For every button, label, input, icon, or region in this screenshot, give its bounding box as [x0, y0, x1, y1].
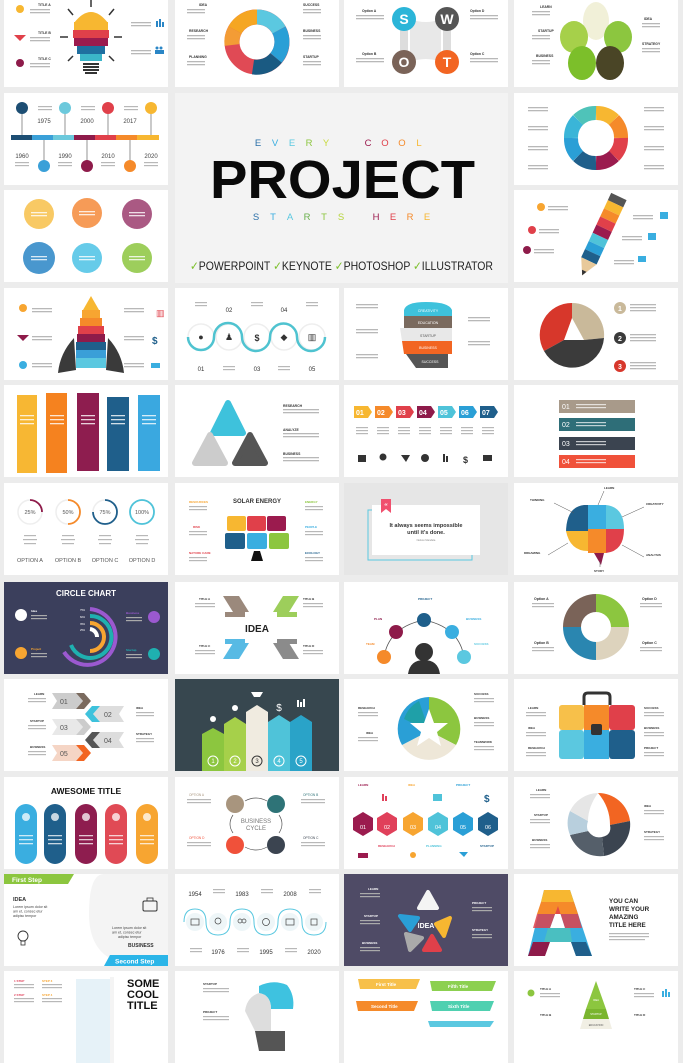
tagline: every cool [255, 138, 422, 149]
tile: quote card: It always seems impossible [389, 523, 463, 529]
tile: person network: PROJECT [418, 597, 432, 601]
tile: percentage rings: 100% [135, 510, 149, 516]
tile: person network [344, 582, 508, 674]
tile: head layers: SUCCESS [422, 360, 439, 364]
tile: percentage rings [4, 483, 168, 575]
tagline: starts here: T [321, 212, 327, 223]
tile: idea star dark: LEARN [368, 887, 378, 891]
tagline: every cool: Y [323, 138, 330, 149]
tile: idea star dark: PROJECT [472, 901, 486, 905]
tile: circles timeline: 1983 [235, 892, 249, 898]
tagline: starts here: R [304, 212, 311, 223]
tile: head layers: CREATIVITY [418, 309, 439, 313]
tile: person network: PLAN [374, 617, 382, 621]
tile: star ring: TEAMWORK [474, 740, 493, 744]
tile: first step / second step: IDEA [13, 897, 26, 903]
tile: numbered tabs: 03 [398, 410, 406, 417]
tile: SWOT: Option B [362, 52, 377, 56]
tile: solar energy: NATURE CARE [189, 551, 211, 555]
tile: briefcase: BUSINESS [644, 726, 659, 730]
tagline: starts here: E [424, 212, 430, 223]
tile: hexagon steps: 01 [360, 825, 366, 831]
tile: brain puzzle: LEARN [604, 486, 614, 490]
tile: ring cycle: PLANNING [189, 55, 207, 59]
tile: idea star dark: STARTUP [364, 914, 378, 918]
tile: chevron steps: LEARN [34, 692, 44, 696]
tile: letter A: WRITE YOUR [609, 906, 650, 913]
tile: idea star dark: STRATEGY [472, 928, 488, 932]
tile: solar energy: ENERGY [305, 500, 318, 504]
tile: idea arrows: TITLE A [199, 597, 211, 601]
tile: year timeline: 2000 [80, 119, 94, 125]
tile: solar energy: RESOURCES [189, 500, 208, 504]
tile: puzzle ring: Option C [642, 641, 657, 645]
tile: awesome title pills: AWESOME TITLE [51, 786, 122, 796]
tile: hexagon steps: STARTUP [480, 844, 494, 848]
tile: percentage rings: OPTION B [55, 558, 81, 564]
tile: pyramid: TITLE D [634, 1013, 646, 1017]
tile: wave steps: $ [254, 333, 260, 343]
tile: ring cycle: SUCCESS [303, 3, 320, 7]
tile: spiral cycle: LEARN [536, 788, 546, 792]
tile: percentage rings: OPTION D [129, 558, 155, 564]
tile: circles timeline: 2008 [283, 892, 297, 898]
tile: person network: TEAM [366, 642, 375, 646]
tile: briefcase: LEARN [528, 706, 538, 710]
tile: year timeline: 2017 [123, 119, 137, 125]
tile: hexagon steps: 05 [460, 825, 466, 831]
tile: solar energy: ECOLOGY [305, 551, 320, 555]
tile: medical ring [514, 93, 678, 185]
software list: ✓POWERPOINT ✓KEYNOTE ✓PHOTOSHOP ✓ILLUSTRATOR [190, 259, 493, 273]
tile: circle chart dark [4, 582, 168, 674]
tile: business cycle: BUSINESS [241, 819, 271, 825]
tile: letter A [514, 874, 678, 966]
tile: chevron steps: 01 [60, 699, 68, 706]
tile: percentage rings: 25% [24, 510, 36, 516]
tile: circle chart dark: Idea [31, 609, 37, 613]
tile: circles timeline: 1976 [211, 950, 225, 956]
tile: spiral cycle: STRATEGY [644, 830, 660, 834]
tile: chevron steps: STRATEGY [136, 732, 152, 736]
tile: chevron steps: 02 [104, 712, 112, 719]
tile: brush titles: Sixth Title [448, 1004, 470, 1009]
tile: letter A: TITLE HERE [609, 922, 646, 929]
tile: some cool title: COOL [127, 989, 159, 1001]
tile: triangle trio [175, 385, 339, 477]
tile: wave steps [175, 288, 339, 380]
tile: idea star dark [344, 874, 508, 966]
tile: wave steps: ◆ [281, 332, 288, 342]
tile: leaves: STRATEGY [642, 42, 661, 46]
tile: SWOT: T [443, 54, 452, 70]
tile: idea star dark: BUSINESS [362, 941, 377, 945]
tile: leaves: BUSINESS [536, 54, 554, 58]
tile: quote card [344, 483, 508, 575]
tile: year timeline: 2020 [144, 154, 158, 160]
tile: circle chart dark: 25% [80, 629, 86, 632]
tile: star ring: IDEA [366, 731, 374, 735]
tile: business cycle: CYCLE [246, 826, 266, 832]
tile: numbered tabs: 04 [419, 410, 427, 417]
tile: brush titles: First Title [376, 982, 397, 987]
tagline: starts here: E [390, 212, 396, 223]
tagline: starts here: A [287, 212, 294, 223]
tile: numbered tabs: 01 [356, 410, 364, 417]
tile: briefcase: RESEARCH [528, 746, 545, 750]
tile: idea arrows [175, 582, 339, 674]
tile: idea arrows: TITLE D [303, 644, 315, 648]
tile: SWOT: S [399, 11, 409, 27]
tile: triangle trio: RESEARCH [283, 404, 303, 408]
tile: pyramid: STARTUP [590, 1013, 602, 1016]
tile: letter A: YOU CAN [609, 898, 638, 905]
tile: dark arrow columns: 5 [299, 759, 303, 765]
tile: hexagon steps: PROJECT [456, 783, 470, 787]
tile: pencil [514, 190, 678, 282]
tile: business cycle: OPTION A [189, 793, 205, 797]
tile: hexagon steps: 06 [485, 825, 491, 831]
tile: business cycle: OPTION D [189, 836, 205, 840]
tile: SWOT [344, 0, 508, 87]
tile: percentage rings: 75% [99, 510, 111, 516]
tile: percentage rings: 50% [62, 510, 74, 516]
tile: percentage rings: OPTION A [17, 558, 43, 564]
tile: triangle cycle: 2 [618, 336, 622, 343]
tagline: starts here [253, 212, 430, 223]
tile: pyramid: TITLE A [540, 987, 552, 991]
tile: circle chart dark: Business [126, 611, 140, 615]
tile: hexagon steps: 02 [384, 825, 390, 831]
tile: triangle trio: ANALYZE [283, 428, 299, 432]
tagline: every cool: O [381, 138, 389, 149]
tile: person network: BUSINESS [466, 617, 481, 621]
tile: some cool title: 2 STEP [14, 993, 24, 997]
tile: pyramid [514, 971, 678, 1063]
tile: first step / second step: First Step [12, 877, 42, 884]
tile: wave steps: 05 [309, 367, 316, 373]
tile: pyramid: EDUCATION [589, 1024, 603, 1027]
tile: business cycle: OPTION C [303, 836, 319, 840]
tile: chevron steps: 05 [60, 751, 68, 758]
tile: ring cycle: STARTUP [303, 55, 319, 59]
tile: numbered tabs [344, 385, 508, 477]
tile: chevron steps: BUSINESS [30, 745, 45, 749]
tile: brush titles: Second Title [371, 1004, 398, 1009]
tile: chevron steps: 03 [60, 725, 68, 732]
tile: SWOT: Option C [470, 52, 485, 56]
tile: some cool title: STEP 3 [42, 979, 53, 983]
tile: some cool title: TITLE [127, 1000, 158, 1012]
tile: year timeline: 1975 [37, 119, 51, 125]
tile: some cool title [4, 971, 168, 1063]
tile: year timeline: 2010 [101, 154, 115, 160]
tile: brain puzzle: DREAMING [524, 551, 541, 555]
tile: some cool title: STEP 4 [42, 993, 53, 997]
tile: circle chart dark: 60% [80, 616, 86, 619]
tile: business cycle [175, 777, 339, 869]
tile: head puzzle [175, 971, 339, 1063]
tile: spiral cycle: STARTUP [534, 813, 548, 817]
tile: circle chart dark: Startup [126, 648, 137, 652]
tagline: starts here: S [253, 212, 259, 223]
tile: briefcase [514, 679, 678, 771]
tile: dark arrow columns [175, 679, 339, 771]
tile: numbered tabs: 05 [440, 410, 448, 417]
tile: pyramid: TITLE B [540, 1013, 552, 1017]
tile: triangle cycle: 3 [618, 364, 622, 371]
tile: brain puzzle [514, 483, 678, 575]
tile: head puzzle: PROJECT [203, 1010, 217, 1014]
tile: head layers: STARTUP [420, 334, 437, 338]
tile: quote card: Nelson Mandela [417, 538, 436, 542]
tile: ring cycle: BUSINESS [303, 29, 321, 33]
tile: leaves [514, 0, 678, 87]
tile: star ring: RESEARCH [358, 706, 375, 710]
tile: dark arrow columns: 4 [277, 759, 281, 765]
tile: wave steps: 04 [281, 308, 288, 314]
tile: first step / second step [4, 874, 168, 966]
tile: first step / second step: adipisc tempor [118, 935, 142, 939]
tile: leaves: IDEA [644, 17, 653, 21]
tagline: every cool: L [416, 138, 422, 149]
tile: star ring: BUSINESS [474, 716, 489, 720]
tile: dark arrow columns: 3 [255, 759, 259, 765]
tile: ring cycle: RESEARCH [189, 29, 209, 33]
tile: circle chart dark: CIRCLE CHART [56, 589, 116, 598]
tile: briefcase: SUCCESS [644, 706, 659, 710]
tagline: starts here: T [270, 212, 276, 223]
tile: triangle trio: BUSINESS [283, 452, 301, 456]
tile: SWOT: Option D [470, 9, 485, 13]
tile: leaves: STARTUP [538, 29, 554, 33]
tagline: every cool: V [272, 138, 279, 149]
tile: triangle cycle [514, 288, 678, 380]
tile: wave steps: ● [198, 332, 204, 342]
tile: dark arrow columns: 1 [211, 759, 215, 765]
tile: rocket: ▥ [156, 308, 165, 318]
tile: letter A: AMAZING [609, 914, 638, 921]
tile: some cool title: SOME [127, 978, 159, 990]
tile: year timeline: 1990 [58, 154, 72, 160]
tagline: every cool: E [289, 138, 295, 149]
tile: numbered tabs: 07 [482, 410, 490, 417]
tile: chevron steps [4, 679, 168, 771]
tile: puzzle ring: Option A [534, 597, 549, 601]
tile: option ribbons: 02 [562, 422, 570, 429]
tile: solar energy [175, 483, 339, 575]
tile: first step / second step: Lorem ipsum dolor sit [112, 926, 146, 930]
tile: circle chart dark: Project [31, 647, 41, 651]
tile: puzzle ring: Option B [534, 641, 549, 645]
tile: idea arrows: TITLE C [199, 644, 211, 648]
tile: dark arrow columns: $ [276, 703, 282, 714]
tile: idea star dark: IDEA [418, 923, 434, 930]
tile: brush titles: Fifth Title [448, 984, 469, 989]
tile: SWOT: W [440, 11, 454, 27]
tile: option ribbons: 03 [562, 441, 570, 448]
tile: star ring: SUCCESS [474, 692, 489, 696]
tile: lightbulb infographic: TITLE A [38, 3, 51, 7]
tagline: every cool: R [306, 138, 313, 149]
tile: awesome title pills [4, 777, 168, 869]
tile: brain puzzle: THINKING [530, 498, 545, 502]
tile: first step / second step: BUSINESS [128, 943, 154, 949]
main title: PROJECT [210, 150, 475, 210]
tile: head puzzle: STARTUP [203, 982, 217, 986]
tile: numbered tabs: 06 [461, 410, 469, 417]
tile: hexagon steps: 04 [435, 825, 441, 831]
tile: wave steps: 01 [198, 367, 205, 373]
tile: spiral cycle: BUSINESS [532, 838, 547, 842]
tile: puzzle ring: Option D [642, 597, 657, 601]
tile: option ribbons: 04 [562, 459, 570, 466]
tile: business cycle: OPTION B [303, 793, 318, 797]
tile: SWOT: Option A [362, 9, 377, 13]
tile: head layers: EDUCATION [418, 321, 439, 325]
tile: first step / second step: Second Step [115, 958, 154, 966]
tile: puzzle ring [514, 582, 678, 674]
tile: ring cycle: IDEA [199, 3, 208, 7]
tile: brain puzzle: CREATIVITY [646, 502, 664, 506]
tagline: starts here: R [407, 212, 414, 223]
tile: quote card: “ [384, 502, 388, 510]
tile: brain puzzle: STUDY [594, 569, 604, 573]
tile: some cool title: 1 STEP [14, 979, 24, 983]
tile: hexagon steps: $ [484, 794, 490, 805]
tile: head layers [344, 288, 508, 380]
tile: leaves: LEARN [540, 5, 552, 9]
tile: numbered tabs: $ [463, 455, 468, 465]
tile: rocket [4, 288, 168, 380]
tile: ring cycle [175, 0, 339, 87]
tile: brain puzzle: ANALYSIS [646, 553, 661, 557]
tile: first step / second step: adipisc tempor [13, 914, 37, 918]
tile: paint brushes [4, 385, 168, 477]
tile: head layers: BUSINESS [419, 346, 438, 350]
tile: pyramid: IDEA [593, 999, 599, 1002]
tile: triangle cycle: 1 [618, 306, 622, 313]
tile: circles timeline [175, 874, 339, 966]
tile: numbered tabs: 02 [377, 410, 385, 417]
tile: hexagon steps: LEARN [358, 783, 368, 787]
tile: hexagon steps [344, 777, 508, 869]
tile: circles timeline: 1954 [188, 892, 202, 898]
title block: every cool project [175, 93, 508, 283]
tile: pyramid: TITLE C [634, 987, 646, 991]
tile: option ribbons [514, 385, 678, 477]
tile: year timeline: 1960 [15, 154, 29, 160]
tile: solar energy: PEOPLE [305, 525, 317, 529]
tile: spiral cycle [514, 777, 678, 869]
tile: quote card: until it's done. [407, 530, 445, 536]
tile: first step / second step: am et, consec etur [13, 910, 43, 914]
tagline: every cool: O [398, 138, 406, 149]
tile: briefcase: IDEA [528, 726, 536, 730]
tagline: starts here: S [338, 212, 344, 223]
tile: circles timeline: 2020 [307, 950, 321, 956]
tile: watercolor blobs [4, 190, 168, 282]
tile: chevron steps: STARTUP [30, 719, 44, 723]
tile: wave steps: 03 [254, 367, 261, 373]
tile: rocket: $ [152, 336, 158, 347]
tile: percentage rings: OPTION C [92, 558, 118, 564]
tile: option ribbons: 01 [562, 404, 570, 411]
tile: first step / second step: Lorem ipsum dolor sit [13, 905, 47, 909]
tile: hexagon steps: IDEA [408, 783, 416, 787]
tile: spiral cycle: IDEA [644, 804, 652, 808]
tile: chevron steps: 04 [104, 738, 112, 745]
tile: hexagon steps: RESEARCH [378, 844, 395, 848]
tile: lightbulb infographic [4, 0, 168, 87]
tile: solar energy: SOLAR ENERGY [233, 499, 281, 505]
tile: wave steps: 02 [226, 308, 233, 314]
tile: hexagon steps: PLANNING [426, 844, 442, 848]
tile: brush titles [344, 971, 508, 1063]
tile: idea arrows: IDEA [245, 624, 269, 635]
tile: person network: SUCCESS [474, 642, 489, 646]
tile: wave steps: ▥ [308, 332, 316, 342]
tagline: starts here: H [373, 212, 380, 223]
tile: dark arrow columns: 2 [233, 759, 237, 765]
tile: hexagon steps: 03 [410, 825, 416, 831]
tagline: every cool: E [255, 138, 261, 149]
tile: year timeline [4, 93, 168, 185]
tile: lightbulb infographic: TITLE C [38, 57, 51, 61]
tile: circle chart dark: 75% [80, 609, 86, 612]
tile: lightbulb infographic: TITLE B [38, 31, 51, 35]
tile: briefcase: PROJECT [644, 746, 658, 750]
tile: circles timeline: 1995 [259, 950, 273, 956]
tile: chevron steps: IDEA [136, 706, 144, 710]
tile: solar energy: RISK [193, 525, 201, 529]
tagline: every cool: C [365, 138, 372, 149]
tile: circle chart dark: 35% [80, 623, 86, 626]
tile: first step / second step: am et, consec etur [112, 930, 142, 934]
tile: SWOT: O [399, 54, 410, 70]
tile: wave steps: ♟ [225, 332, 233, 342]
tile: idea arrows: TITLE B [303, 597, 315, 601]
tile: star ring [344, 679, 508, 771]
